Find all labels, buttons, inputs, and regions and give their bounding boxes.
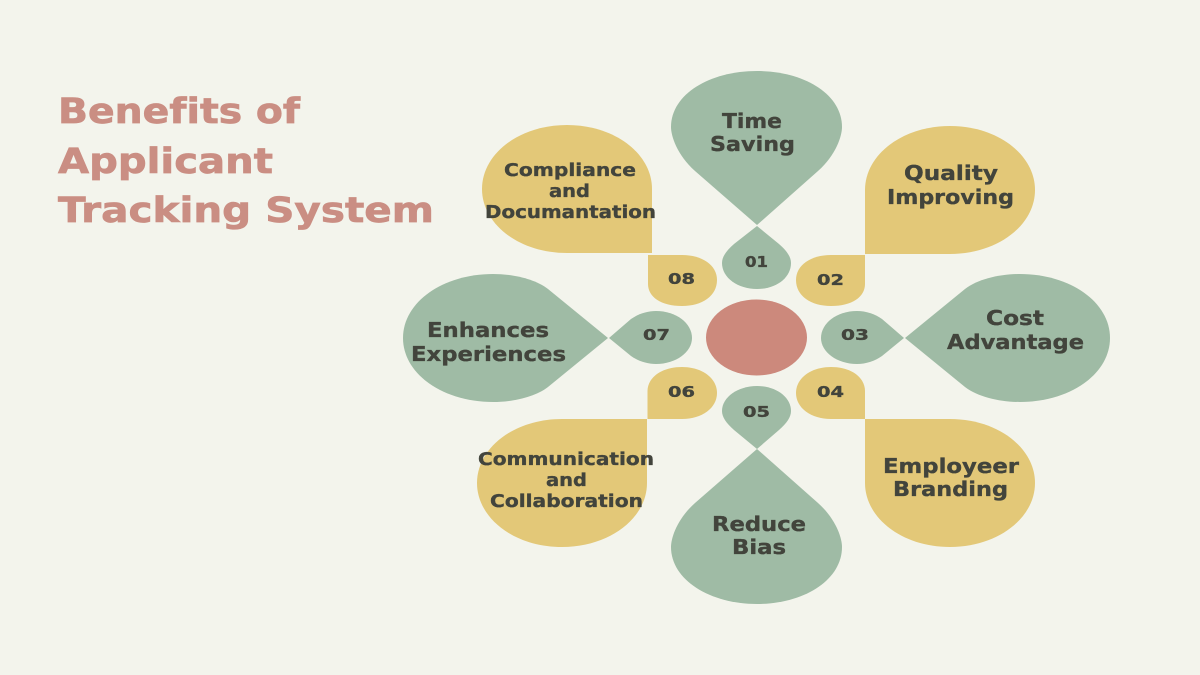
petal 08: Compliance and Documentation: and [549,182,590,202]
title [58,92,434,231]
title: Applicant [58,142,273,182]
number 04: 04 [817,383,844,401]
petal 04: Employer Branding: Employeer [883,454,1020,478]
petal 02: Quality Improving: Quality [904,161,998,185]
petal 06: Communication and Collaboration: Communication [478,450,654,470]
petal 07: Enhances Experiences: Experiences [411,342,566,366]
petal 07: Enhances Experiences: Enhances [427,318,549,342]
petal 02: Quality Improving: Improving [887,185,1014,209]
petal 06: Communication and Collaboration: Collaboration [490,492,643,512]
number 01 [722,226,791,289]
number 02 [796,255,865,306]
petal 01: Time Saving: Saving [710,132,795,156]
title: Benefits of [58,92,301,132]
petal 05: Reduce Bias [671,449,842,604]
number 01: 01 [745,253,768,271]
petal 05: Reduce Bias: Bias [732,535,786,559]
petal 07: Enhances Experiences [403,274,608,402]
petal 02: Quality Improving [865,126,1035,254]
center circle [706,300,807,376]
number 02: 02 [817,271,844,289]
petal 04: Employer Branding [865,419,1035,547]
number 06 [648,367,717,419]
petal 08: Compliance and Documentation [482,125,656,253]
number 03: 03 [841,326,869,344]
petal 05: Reduce Bias: Reduce [712,512,806,536]
number 04 [796,367,865,419]
petal 04: Employer Branding: Branding [893,477,1008,501]
petal 03: Cost Advantage: Advantage [947,330,1084,354]
number 07: 07 [643,326,670,344]
petal 01: Time Saving: Time [722,109,782,133]
number 03 [821,311,904,364]
number 06: 06 [668,383,695,401]
number 05: 05 [743,403,770,421]
petal 03: Cost Advantage: Cost [986,306,1044,330]
number 08: 08 [668,270,695,288]
petal 01: Time Saving [671,71,842,225]
petal 06: Communication and Collaboration [477,419,654,547]
number 07 [609,311,692,364]
number 08 [648,255,717,306]
petal 08: Compliance and Documentation: Documantation [485,203,656,223]
title: Tracking System [58,191,434,231]
petal 03: Cost Advantage [905,274,1110,402]
petal 08: Compliance and Documentation: Compliance [504,161,636,181]
petal 06: Communication and Collaboration: and [546,471,587,491]
number 05 [722,386,791,449]
